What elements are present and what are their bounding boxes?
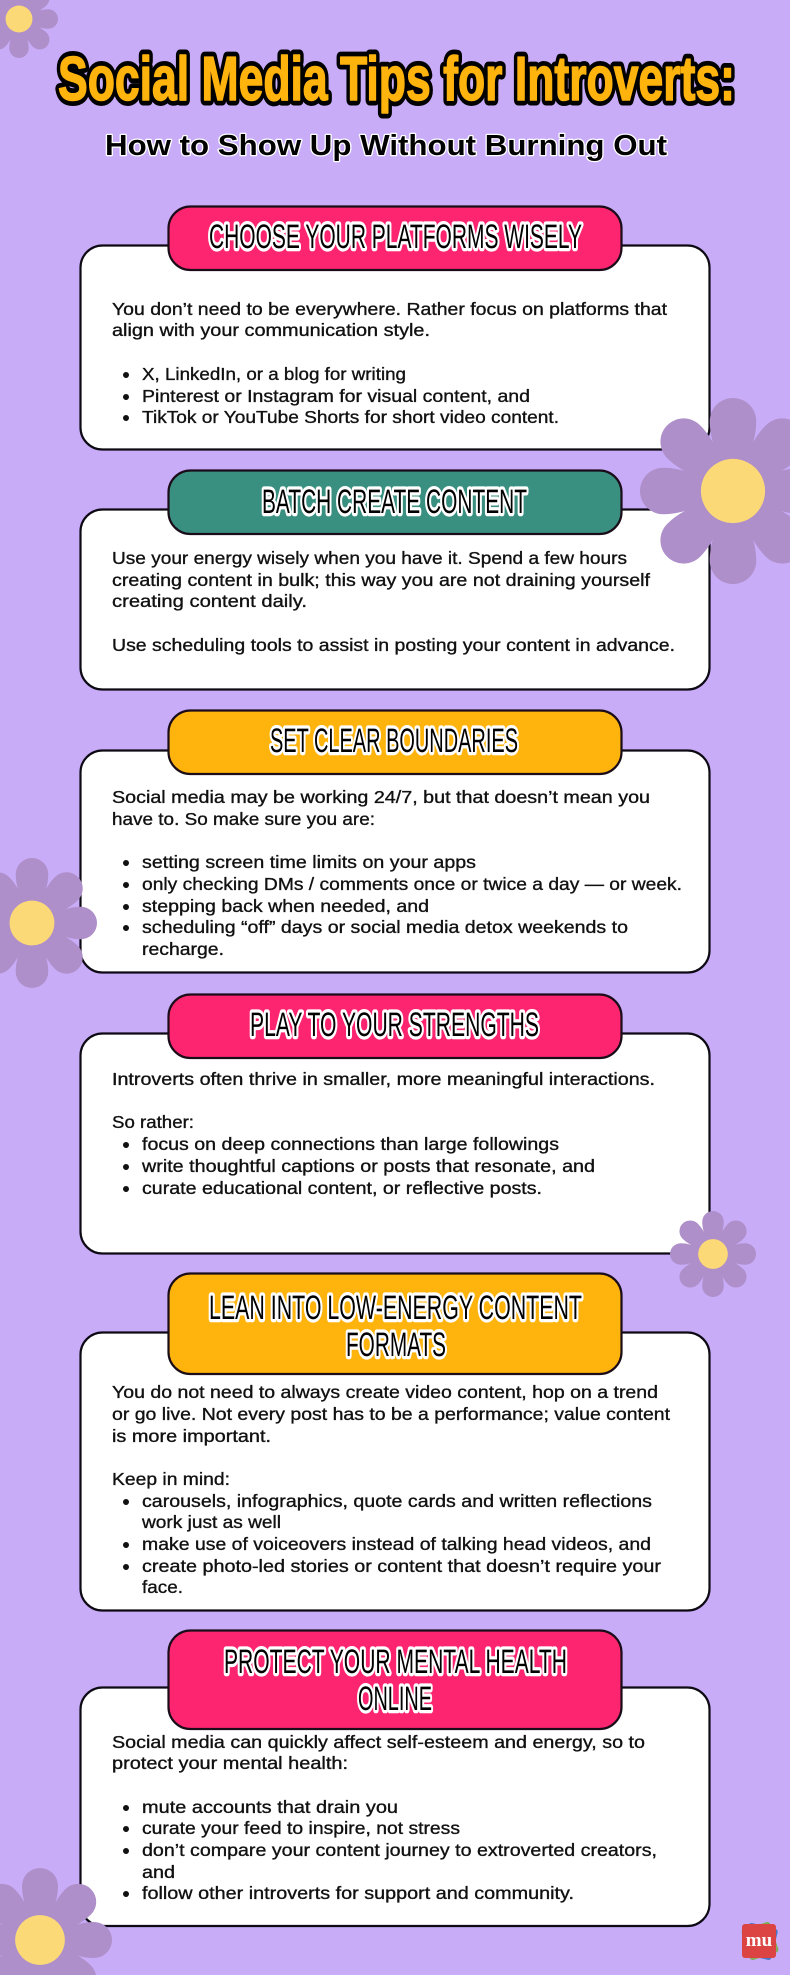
icon: small flower right of strengths card [670,1211,756,1297]
body text: platforms: You don’t need to be everywhere. Rather focus on platforms that [112,299,667,319]
body text: boundaries: scheduling “off” days or social media detox weekends to [142,917,628,937]
body text: strengths: Introverts often thrive in smaller, more meaningful interactions. [112,1069,655,1089]
body text: boundaries: have to. So make sure you are: [112,809,375,829]
body text: mental health: curate your feed to inspire, not stress [142,1818,460,1838]
panel: protect your mental health online [80,1630,710,1926]
icon: mu logo: mu [746,1930,773,1951]
body text: low-energy formats: carousels, infographics, quote cards and written reflections [142,1491,652,1511]
body text: mental health [112,1732,657,1903]
body text: low-energy formats: is more important. [112,1426,271,1446]
icon: mu logo [741,1921,779,1961]
body text: platforms: Pinterest or Instagram for visual content, and [142,386,530,406]
heading pill: protect your mental health online [168,1630,622,1729]
heading pill: lean into low-energy content formats: LEAN INTO LOW-ENERGY CONTENT [209,1289,582,1327]
icon: flower top left [0,0,58,58]
body text: low-energy formats: work just as well [141,1512,281,1532]
heading pill: play to your strengths [168,994,622,1058]
heading pill: set clear boundaries [168,710,622,774]
body text: platforms: TikTok or YouTube Shorts for short video content. [142,407,559,427]
body text: mental health: don’t compare your content journey to extroverted creators, [142,1840,657,1860]
panel: play to your strengths [80,994,710,1254]
body text: strengths: write thoughtful captions or posts that resonate, and [141,1156,595,1176]
panel: set clear boundaries [80,710,710,972]
body text: boundaries: stepping back when needed, and [142,896,429,916]
body text: low-energy formats: face. [142,1577,183,1597]
body text: platforms: X, LinkedIn, or a blog for writing [142,364,406,384]
body text: platforms [112,299,667,427]
panel: choose your platforms wisely [80,206,710,450]
body text: low-energy formats: Keep in mind: [112,1469,230,1489]
heading pill: set clear boundaries: SET CLEAR BOUNDARIES [270,722,518,760]
heading pill: lean into low-energy content formats: FORMATS [346,1326,446,1364]
heading pill: batch create content [168,470,622,534]
body text: low-energy formats [112,1382,670,1597]
body text: strengths: So rather: [112,1112,194,1132]
body text: batching: Use your energy wisely when you have it. Spend a few hours [112,548,627,568]
body text: boundaries: setting screen time limits on your apps [142,852,476,872]
body text: batching: creating content in bulk; this way you are not draining yourself [112,570,650,590]
body text: strengths [112,1069,655,1198]
body text: boundaries: only checking DMs / comments once or twice a day — or week. [142,874,682,894]
body text: batching: Use scheduling tools to assist in posting your content in advance. [112,635,675,655]
heading pill: batch create content: BATCH CREATE CONTENT [262,483,527,521]
icon: flower bottom left [0,1868,112,1975]
icon: flower left of boundaries card [0,858,97,988]
body text: mental health: Social media can quickly affect self-esteem and energy, so to [112,1732,645,1752]
panel: lean into low-energy content formats [80,1274,710,1610]
body text: low-energy formats: You do not need to always create video content, hop on a trend [112,1382,658,1402]
heading pill: protect your mental health online: ONLINE [358,1680,432,1718]
heading pill: choose your platforms wisely [168,206,622,270]
body text: low-energy formats: create photo-led stories or content that doesn’t require your [142,1556,661,1576]
panel: batch create content [80,470,710,690]
body text: mental health: protect your mental health: [112,1753,348,1773]
body text: low-energy formats: make use of voiceovers instead of talking head videos, and [142,1534,651,1554]
body text: strengths: focus on deep connections than large followings [142,1134,559,1154]
body text: strengths: curate educational content, or reflective posts. [142,1178,542,1198]
icon: flower right of first cards [640,398,790,584]
body text: mental health: and [142,1862,175,1882]
heading pill: lean into low-energy content formats [168,1274,622,1374]
heading pill: play to your strengths: PLAY TO YOUR STRENGTHS [250,1006,539,1044]
body text: platforms: align with your communication style. [112,320,430,340]
subtitle: How to Show Up Without Burning Out [105,130,667,162]
body text: low-energy formats: or go live. Not every post has to be a performance; value content [112,1404,670,1424]
body text: mental health: mute accounts that drain you [142,1797,398,1817]
body text: mental health: follow other introverts for support and community. [142,1883,574,1903]
body text: boundaries: recharge. [142,939,224,959]
heading pill: protect your mental health online: PROTECT YOUR MENTAL HEALTH [224,1643,567,1681]
body text: batching: creating content daily. [112,591,307,611]
body text: boundaries [112,787,682,959]
body text: batching [112,548,675,655]
body text: boundaries: Social media may be working 24/7, but that doesn’t mean you [112,787,650,807]
